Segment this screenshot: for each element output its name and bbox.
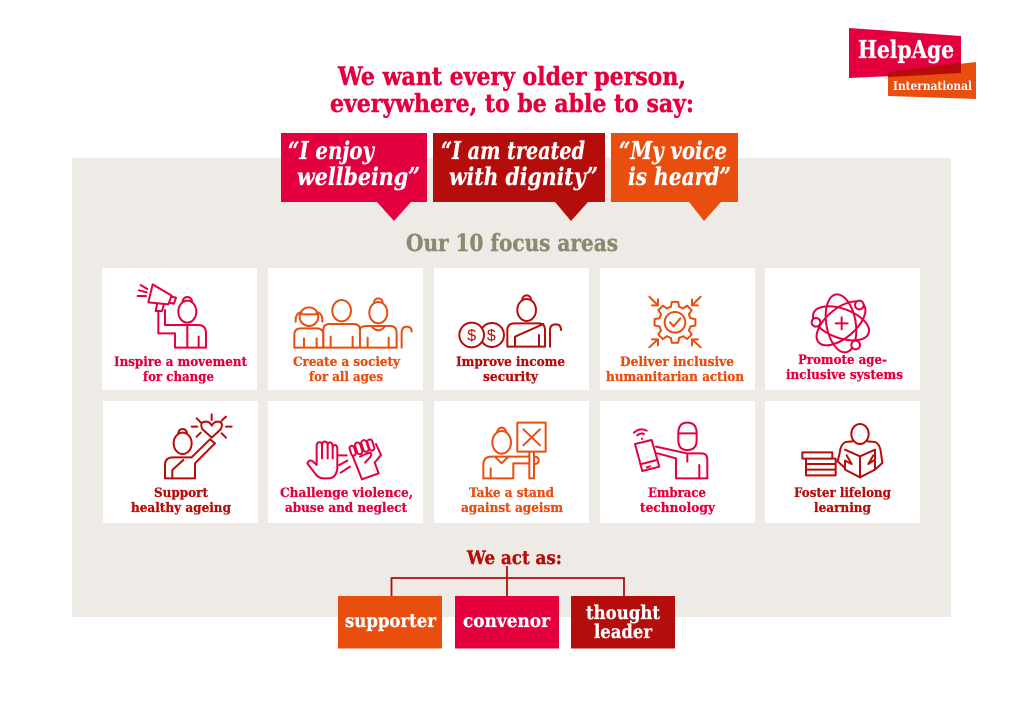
label: inclusive systems (786, 368, 903, 383)
logo: HelpAge International (849, 28, 976, 99)
icon: coins and older person: $ (487, 327, 496, 344)
title: We want every older person, (337, 62, 686, 91)
label: for change (143, 370, 214, 385)
role box: supporter (338, 596, 442, 648)
label: Deliver inclusive (620, 355, 734, 370)
icon: three generations (294, 298, 412, 348)
label: learning (814, 501, 871, 516)
label: Improve income (456, 355, 565, 370)
card: Improve income security (434, 268, 589, 390)
label: Embrace (648, 486, 706, 501)
card: Take a stand against ageism (434, 401, 589, 523)
label: Inspire a movement (114, 355, 247, 370)
label: healthy ageing (131, 501, 231, 516)
label (131, 486, 231, 516)
icon: person reading beside book stack (802, 424, 882, 477)
card: Promote age-inclusive systems (765, 268, 920, 390)
heading: We act as: We act as: (466, 547, 562, 569)
card: Deliver inclusive humanitarian action (600, 268, 755, 390)
label (280, 486, 413, 516)
card: Challenge violence, abuse and neglect (268, 401, 423, 523)
speech bubble: I am treated with dignity: “I am treated (441, 136, 585, 165)
label (461, 486, 563, 516)
background panel (72, 158, 951, 617)
label (293, 355, 400, 385)
logo: HelpAge International: HelpAge (858, 35, 954, 64)
label: Challenge violence, (280, 486, 413, 501)
label (794, 486, 891, 516)
label (114, 355, 247, 385)
label (456, 355, 565, 385)
icon: coins and older person (459, 295, 561, 347)
icon: coins and older person: $ (467, 327, 476, 344)
icon: person holding protest sign (483, 423, 546, 478)
title (330, 62, 694, 118)
speech bubble: I am treated with dignity (433, 133, 605, 221)
connector lines (392, 566, 624, 596)
icon: atom with plus (808, 292, 874, 355)
label: against ageism (461, 501, 563, 516)
label: technology (640, 501, 715, 516)
label (606, 355, 745, 385)
speech bubble: My voice is heard: is heard” (628, 162, 731, 191)
speech bubble: I enjoy wellbeing: “I enjoy (288, 136, 376, 165)
speech bubble: I enjoy wellbeing (281, 133, 427, 221)
role box: thought leader: leader (594, 621, 653, 643)
card: Create a society for all ages (268, 268, 423, 390)
label: Take a stand (469, 486, 554, 501)
icon: open hand and fist (307, 439, 381, 479)
role box: convenor (455, 596, 559, 648)
title: everywhere, to be able to say: (330, 89, 694, 118)
label: Promote age- (798, 353, 887, 368)
icon: person raising a heart (165, 414, 232, 478)
label: abuse and neglect (285, 501, 407, 516)
logo: HelpAge International: International (893, 79, 972, 93)
speech bubble: My voice is heard (611, 133, 738, 221)
icon: gear with check and arrows (649, 297, 701, 347)
card: Foster lifelong learning (765, 401, 920, 523)
label (786, 353, 903, 383)
role box: supporter: supporter (345, 610, 437, 632)
role box: thought leader (571, 596, 675, 648)
label (640, 486, 715, 516)
label: Support (154, 486, 208, 501)
label: humanitarian action (606, 370, 745, 385)
label: security (483, 370, 538, 385)
speech bubble: I am treated with dignity: with dignity” (449, 162, 598, 191)
card: Inspire a movement for change (102, 268, 257, 390)
label: for all ages (309, 370, 383, 385)
label: Foster lifelong (794, 486, 891, 501)
role box: thought leader: thought (586, 602, 660, 624)
icon: person with megaphone (138, 284, 206, 348)
heading: Our 10 focus areas: Our 10 focus areas (406, 230, 618, 257)
label: Create a society (293, 355, 400, 370)
card: Embrace technology (600, 401, 755, 523)
icon: person with smartphone (634, 423, 707, 478)
speech bubble: I enjoy wellbeing: wellbeing” (297, 162, 420, 191)
speech bubble: My voice is heard: “My voice (619, 136, 727, 165)
card: Support healthy ageing (103, 401, 258, 523)
role box: convenor: convenor (463, 610, 551, 632)
